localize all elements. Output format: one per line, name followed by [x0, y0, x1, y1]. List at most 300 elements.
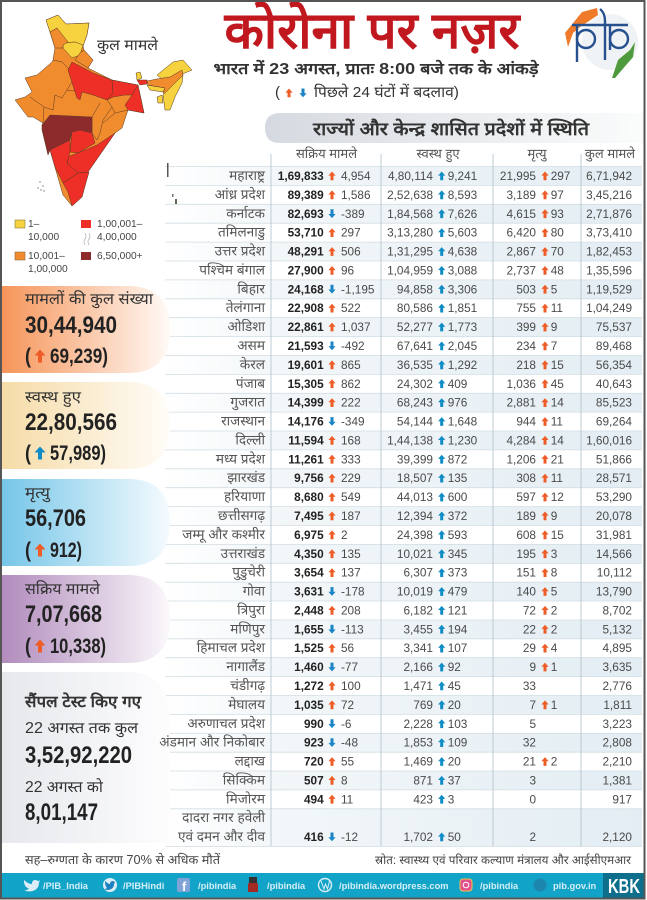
- row: West Bengal: 2,737: [506, 264, 536, 278]
- row: Sikkim: 37: [448, 773, 461, 787]
- row: Haryana: 600: [448, 490, 468, 504]
- row: Chhattisgarh: छत्तीसगढ़: [218, 507, 265, 523]
- row: Andaman and Nicobar: 1,853: [403, 736, 433, 750]
- row: Uttar Pradesh: 4,638: [448, 245, 478, 259]
- row: Himachal Pradesh: हिमाचल प्रदेश: [197, 639, 266, 655]
- row: West Bengal: 96: [341, 264, 355, 278]
- row: Assam: 89,468: [596, 339, 632, 353]
- islands: [37, 163, 177, 204]
- row: Andhra Pradesh: 2,52,638: [387, 188, 433, 202]
- row: Meghalaya: 7: [529, 698, 536, 712]
- row: Madhya Pradesh: 39,399: [397, 452, 433, 466]
- row: Tripura: त्रिपुरा: [237, 601, 265, 618]
- row: Andaman and Nicobar: अंडमान और निकोबार: [159, 734, 265, 750]
- row: Chhattisgarh: 12,394: [397, 509, 433, 523]
- row: Nagaland: 1,460: [294, 660, 324, 674]
- icon: twitter: [24, 880, 40, 892]
- legend: 4,00,000: [97, 232, 137, 243]
- row: Maharashtra: 9,241: [448, 169, 477, 183]
- row shading: [165, 166, 642, 846]
- row: Mizoram: 3: [448, 792, 455, 806]
- row: Puducherry: 6,307: [403, 566, 433, 580]
- row: Himachal Pradesh: 56: [341, 641, 355, 655]
- row: Karnataka: 1,84,568: [387, 207, 433, 221]
- row: Puducherry: 137: [341, 566, 361, 580]
- row: Chhattisgarh: [218, 507, 632, 523]
- row: Meghalaya: मेघालय: [228, 696, 266, 712]
- row: Madhya Pradesh: 21: [551, 452, 564, 466]
- row: Ladakh: 2: [551, 755, 557, 769]
- row: Goa: 140: [516, 585, 536, 599]
- row: Assam: असम: [237, 338, 266, 353]
- row: Odisha: 1,037: [341, 320, 371, 334]
- row: Chandigarh: 1,272: [294, 679, 324, 693]
- row: Assam: 21,593: [288, 339, 324, 353]
- row: Delhi: 1,230: [448, 433, 478, 447]
- row: Madhya Pradesh: 51,866: [596, 452, 632, 466]
- row: Jharkhand: 229: [341, 471, 361, 485]
- footer band: /pibindia: [198, 881, 237, 891]
- card: recovered: 57,989): [50, 442, 106, 465]
- row: Nagaland: -77: [341, 660, 358, 674]
- card: active cases: (: [25, 635, 31, 658]
- row: Kerala: 865: [341, 358, 361, 372]
- icon: facebook: f: [182, 879, 187, 894]
- row: Nagaland: [226, 658, 632, 674]
- row: Jharkhand: 28,571: [596, 471, 632, 485]
- row: Karnataka: [226, 205, 632, 221]
- row: Gujarat: 2,881: [506, 396, 536, 410]
- row: Arunachal Pradesh: 2,228: [403, 717, 433, 731]
- card: total cases: 69,239): [50, 345, 108, 368]
- row: Mizoram: 423: [413, 792, 433, 806]
- row: Kerala: 15: [551, 358, 564, 372]
- column headers: कुल मामले: [585, 146, 635, 162]
- row: Karnataka: 2,71,876: [586, 207, 632, 221]
- row: Gujarat: 976: [448, 396, 468, 410]
- row: Odisha: 1,773: [448, 320, 478, 334]
- row: Uttarakhand: 10,021: [397, 547, 433, 561]
- row: Karnataka: 7,626: [448, 207, 478, 221]
- row: Mizoram: [226, 790, 632, 806]
- row: Maharashtra: 297: [551, 169, 570, 183]
- row: Tamil Nadu: 3,13,280: [387, 226, 433, 240]
- row: Arunachal Pradesh: 5: [529, 717, 536, 731]
- row: Manipur: 5,132: [602, 622, 632, 636]
- row: Puducherry: 10,112: [597, 566, 632, 580]
- row: Dadra Nagar Haveli and Daman Diu: 1,702: [403, 830, 433, 844]
- row: Odisha: 52,277: [397, 320, 433, 334]
- row: Goa: गोवा: [243, 583, 265, 599]
- row: Assam: -492: [341, 339, 365, 353]
- row: Tamil Nadu: 3,73,410: [586, 226, 632, 240]
- row: Maharashtra: 21,995: [500, 169, 536, 183]
- row: Madhya Pradesh: मध्य प्रदेश: [216, 450, 266, 466]
- row: Haryana: 597: [516, 490, 536, 504]
- row: Jharkhand: [227, 470, 632, 485]
- row: Delhi: दिल्ली: [235, 431, 265, 447]
- row: Goa: -178: [341, 585, 365, 599]
- row: Tamil Nadu: [218, 224, 632, 241]
- row: Uttar Pradesh: [215, 243, 632, 259]
- row: Rajasthan: 944: [516, 415, 536, 429]
- icon: wordpress: [318, 878, 332, 892]
- icon: twitter badge: [103, 878, 117, 892]
- card: sample tests: 3,52,92,220: [25, 742, 132, 769]
- card: recovered: स्वस्थ हुए: [25, 389, 81, 407]
- row: Karnataka: 4,615: [506, 207, 536, 221]
- row: Jammu and Kashmir: जम्मू और कश्मीर: [182, 526, 265, 543]
- row: Andaman and Nicobar: [159, 734, 632, 750]
- card: sample tests: 22 अगस्त को: [25, 778, 104, 796]
- row: Mizoram: 0: [529, 792, 536, 806]
- card: recovered: [2, 382, 170, 469]
- row: Kerala: [240, 356, 632, 372]
- row: Bihar: -1,195: [341, 282, 375, 296]
- card: deaths: 912): [50, 539, 82, 562]
- row: Andaman and Nicobar: -48: [341, 736, 358, 750]
- row: Haryana: 44,013: [397, 490, 433, 504]
- row: Kerala: 56,354: [596, 358, 632, 372]
- row: Kerala: 36,535: [397, 358, 433, 372]
- row: West Bengal: 48: [551, 264, 564, 278]
- row: Gujarat: 14: [551, 396, 564, 410]
- row: Tamil Nadu: 6,420: [506, 226, 536, 240]
- row: Meghalaya: 1: [551, 698, 557, 712]
- row: Telangana: 1,04,249: [586, 301, 632, 315]
- row: Odisha: 399: [516, 320, 536, 334]
- row: Delhi: [235, 431, 632, 447]
- row: Bihar: [237, 280, 632, 296]
- row: Puducherry: 373: [448, 566, 468, 580]
- row: Kerala: 19,601: [288, 358, 324, 372]
- row: Jharkhand: 308: [516, 471, 536, 485]
- legend: 1,00,000: [28, 264, 68, 275]
- row: Tripura: 6,182: [403, 603, 433, 617]
- row: Delhi: 1,44,138: [387, 433, 433, 447]
- legend: 1,00,001–: [97, 219, 143, 230]
- row: Karnataka: -389: [341, 207, 365, 221]
- row: Puducherry: पुडुचेरी: [232, 564, 265, 581]
- row: Meghalaya: 769: [413, 698, 433, 712]
- row: Uttar Pradesh: 48,291: [288, 245, 324, 259]
- row: Tripura: [237, 601, 632, 618]
- row: Madhya Pradesh: 333: [341, 452, 361, 466]
- row: Sikkim: 871: [413, 773, 433, 787]
- row: Sikkim: 8: [341, 773, 348, 787]
- card: deaths: (: [25, 539, 31, 562]
- row: Punjab: 1,036: [506, 377, 536, 391]
- row: Puducherry: 3,654: [294, 566, 324, 580]
- row: Punjab: 862: [341, 377, 361, 391]
- row: Punjab: [236, 376, 632, 391]
- change note: (: [275, 84, 280, 101]
- title: कोरोना पर नज़र: [223, 1, 522, 59]
- row: Tripura: 2,448: [294, 603, 324, 617]
- row: Haryana: 53,290: [596, 490, 632, 504]
- row: Himachal Pradesh: 107: [448, 641, 467, 655]
- row: Ladakh: [235, 754, 632, 769]
- card: deaths: 56,706: [25, 505, 86, 532]
- row: West Bengal: [199, 262, 632, 278]
- row: Dadra Nagar Haveli and Daman Diu: 2,120: [602, 830, 632, 844]
- legend: [15, 219, 143, 275]
- row: Assam: [237, 338, 632, 353]
- row: Tripura: 121: [448, 603, 467, 617]
- row: Himachal Pradesh: 29: [523, 641, 536, 655]
- row: Uttarakhand: उत्तराखंड: [221, 546, 266, 561]
- card: recovered: 22,80,566: [25, 409, 117, 436]
- row: Manipur: 194: [448, 622, 468, 636]
- row: Andaman and Nicobar: 32: [523, 736, 536, 750]
- row: Andhra Pradesh: 89,389: [288, 188, 324, 202]
- row: Haryana: हरियाणा: [224, 488, 265, 504]
- row: Jammu and Kashmir: 24,398: [397, 528, 433, 542]
- legend: 10,001–: [28, 251, 65, 262]
- row: Punjab: 15,305: [288, 377, 324, 391]
- row: Arunachal Pradesh: -6: [341, 717, 352, 731]
- row: Delhi: 1,60,016: [586, 433, 632, 447]
- card: total cases: 30,44,940: [25, 312, 117, 339]
- row: Arunachal Pradesh: अरुणाचल प्रदेश: [187, 715, 266, 731]
- row: Uttarakhand: 345: [448, 547, 468, 561]
- row: Chhattisgarh: 20,078: [596, 509, 632, 523]
- row: Madhya Pradesh: [216, 450, 632, 466]
- legend: 6,50,000+: [97, 251, 143, 262]
- row: Maharashtra: महाराष्ट्र: [229, 168, 266, 183]
- table heading pill: राज्यों और केन्द्र शासित प्रदेशों में स्थिति: [312, 118, 590, 139]
- row: Telangana: [226, 299, 632, 315]
- row: Andaman and Nicobar: 923: [304, 736, 324, 750]
- row: Nagaland: 92: [448, 660, 461, 674]
- footer band: /pibindia.wordpress.com: [339, 881, 449, 891]
- row: Assam: 67,641: [397, 339, 433, 353]
- row: Jammu and Kashmir: 31,981: [596, 528, 632, 542]
- row: Punjab: 409: [448, 377, 467, 391]
- row: Ladakh: 1,469: [403, 755, 433, 769]
- row: Punjab: 24,302: [397, 377, 433, 391]
- row: Manipur: -113: [341, 622, 364, 636]
- card: sample tests: [2, 672, 170, 843]
- row: Kerala: 1,292: [448, 358, 477, 372]
- row: Uttar Pradesh: 2,867: [506, 245, 536, 259]
- row: Punjab: 45: [551, 377, 564, 391]
- card: deaths: मृत्यु: [25, 485, 51, 503]
- row: Chhattisgarh: 9: [551, 509, 557, 523]
- row: Ladakh: 55: [341, 755, 355, 769]
- row: Tamil Nadu: 53,710: [288, 226, 324, 240]
- row: Goa: 10,019: [397, 585, 433, 599]
- card: deaths: [2, 479, 170, 566]
- row: Haryana: [224, 488, 632, 504]
- footer band: pib.gov.in: [553, 881, 597, 891]
- row: Chandigarh: चंडीगढ़: [230, 677, 265, 693]
- logo: pib: [565, 8, 638, 78]
- row: Gujarat: 85,523: [596, 396, 632, 410]
- row: Himachal Pradesh: 4: [551, 641, 558, 655]
- column headers: [296, 146, 635, 163]
- row: Manipur: 1,655: [294, 622, 324, 636]
- row: Punjab: 40,643: [596, 377, 632, 391]
- row: Ladakh: 21: [523, 755, 536, 769]
- row: Chhattisgarh: 7,495: [294, 509, 324, 523]
- row: Chandigarh: 33: [523, 679, 536, 693]
- row: Uttar Pradesh: 506: [341, 245, 361, 259]
- table rows: [159, 168, 632, 844]
- row: Telangana: 1,851: [448, 301, 477, 315]
- row: Ladakh: 2,210: [602, 755, 632, 769]
- row: Goa: [243, 583, 632, 599]
- row: Sikkim: 507: [304, 773, 324, 787]
- row: Tamil Nadu: 297: [341, 226, 361, 240]
- row: Dadra Nagar Haveli and Daman Diu: 416: [304, 830, 324, 844]
- row: Andaman and Nicobar: 109: [448, 736, 467, 750]
- row: Telangana: तेलंगाना: [226, 299, 265, 315]
- row: Bihar: बिहार: [237, 280, 265, 296]
- row: Assam: 2,045: [448, 339, 478, 353]
- map label: कुल मामले: [97, 36, 159, 55]
- footer band: /pibindia: [267, 881, 306, 891]
- row: Telangana: 11: [551, 301, 563, 315]
- row: Dadra Nagar Haveli and Daman Diu: 50: [448, 830, 461, 844]
- row: Mizoram: 917: [612, 792, 632, 806]
- row: Puducherry: [232, 564, 632, 581]
- card: total cases: मामलों की कुल संख्या: [25, 290, 154, 309]
- column headers: स्वस्थ हुए: [416, 146, 460, 163]
- row: Andhra Pradesh: 1,586: [341, 188, 371, 202]
- row: Uttar Pradesh: 1,31,295: [387, 245, 433, 259]
- row: Madhya Pradesh: 872: [448, 452, 467, 466]
- row: Uttarakhand: 14,566: [596, 547, 632, 561]
- row: Nagaland: 9: [529, 660, 536, 674]
- row: Gujarat: गुजरात: [230, 395, 265, 411]
- row: Rajasthan: [221, 414, 632, 429]
- row: Telangana: 522: [341, 301, 361, 315]
- card: sample tests: सैंपल टेस्ट किए गए: [24, 692, 142, 711]
- row: Karnataka: कर्नाटक: [226, 205, 266, 221]
- row: Andhra Pradesh: 3,189: [506, 188, 536, 202]
- row: Telangana: 80,586: [397, 301, 433, 315]
- row: Bihar: 503: [516, 282, 536, 296]
- row: West Bengal: पश्चिम बंगाल: [199, 262, 266, 278]
- row: Odisha: [228, 318, 632, 334]
- row: Meghalaya: 1,811: [603, 698, 632, 712]
- row: Mizoram: 494: [304, 792, 324, 806]
- row: Uttar Pradesh: 1,82,453: [586, 245, 632, 259]
- row: Dadra Nagar Haveli and Daman Diu: 2: [529, 830, 536, 844]
- row: Dadra Nagar Haveli and Daman Diu: [178, 809, 632, 844]
- row: Arunachal Pradesh: 990: [304, 717, 324, 731]
- row: Maharashtra: [229, 168, 632, 183]
- card: active cases: 10,338): [50, 635, 106, 658]
- row: Haryana: 549: [341, 490, 361, 504]
- row: Rajasthan: -349: [341, 415, 365, 429]
- row: Manipur: मणिपुर: [230, 620, 265, 637]
- icon: globe: [534, 878, 546, 892]
- row: Delhi: 11,594: [288, 433, 324, 447]
- column headers: मृत्यु: [527, 146, 548, 162]
- row: Maharashtra: 1,69,833: [278, 169, 324, 183]
- row: Tamil Nadu: तमिलनाडु: [218, 224, 266, 241]
- card: total cases: [2, 286, 170, 373]
- footer band: [1, 873, 644, 898]
- row: Gujarat: [230, 395, 632, 411]
- row: Meghalaya: 20: [448, 698, 461, 712]
- row: Dadra Nagar Haveli and Daman Diu: -12: [341, 830, 358, 844]
- row: Jammu and Kashmir: 2: [341, 528, 348, 542]
- row: Manipur: 2: [551, 622, 557, 636]
- row: Jammu and Kashmir: 608: [516, 528, 536, 542]
- row: Andhra Pradesh: 8,593: [448, 188, 478, 202]
- row: Nagaland: नागालैंड: [226, 658, 266, 674]
- row: Jharkhand: 18,507: [397, 471, 433, 485]
- row: Karnataka: 82,693: [288, 207, 324, 221]
- row: Jammu and Kashmir: [182, 526, 632, 543]
- row: Tripura: 208: [341, 603, 361, 617]
- row: Chhattisgarh: 187: [341, 509, 361, 523]
- row: Delhi: 14: [551, 433, 564, 447]
- row: Tripura: 8,702: [602, 603, 632, 617]
- row: Manipur: 3,455: [403, 622, 433, 636]
- change note: पिछले 24 घंटों में बदलाव): [314, 83, 459, 101]
- row: Bihar: 5: [551, 282, 558, 296]
- row: Kerala: 218: [516, 358, 536, 372]
- row: Tamil Nadu: 80: [551, 226, 564, 240]
- row: Mizoram: मिजोरम: [226, 790, 266, 806]
- row: Punjab: पंजाब: [236, 376, 265, 391]
- card: sample tests: 22 अगस्त तक कुल: [25, 720, 139, 738]
- row: Sikkim: [223, 771, 632, 787]
- row: Goa: 13,790: [596, 585, 632, 599]
- row: Gujarat: 68,243: [397, 396, 433, 410]
- row: Kerala: केरल: [240, 356, 266, 372]
- icon: facebook: [177, 878, 190, 894]
- row: Sikkim: 3: [529, 773, 536, 787]
- row: Maharashtra: 4,80,114: [388, 169, 433, 183]
- footer band: /PIB_India: [43, 881, 89, 891]
- row: Sikkim: सिक्किम: [223, 771, 266, 787]
- row: Rajasthan: 1,648: [448, 415, 478, 429]
- row: Tamil Nadu: 5,603: [448, 226, 478, 240]
- row: Haryana: 12: [551, 490, 564, 504]
- legend: 1–: [28, 219, 40, 230]
- row: Jharkhand: झारखंड: [227, 470, 266, 485]
- footer band: /pibindia: [480, 881, 519, 891]
- row: Jharkhand: 135: [448, 471, 468, 485]
- row: West Bengal: 1,35,596: [586, 264, 632, 278]
- row: West Bengal: 27,900: [288, 264, 324, 278]
- row: Puducherry: 151: [516, 566, 536, 580]
- row: Nagaland: 2,166: [403, 660, 433, 674]
- row: Gujarat: 14,399: [288, 396, 324, 410]
- row: Andhra Pradesh: [215, 186, 632, 202]
- row: Nagaland: 1: [551, 660, 557, 674]
- row: Madhya Pradesh: 1,206: [506, 452, 536, 466]
- icon: youtube: [248, 877, 258, 892]
- row: Andaman and Nicobar: 2,808: [602, 736, 632, 750]
- row: Assam: 234: [516, 339, 536, 353]
- row: Uttarakhand: 3: [551, 547, 558, 561]
- row: Meghalaya: 1,035: [294, 698, 324, 712]
- card: active cases: [2, 575, 170, 663]
- row: Jammu and Kashmir: 15: [551, 528, 564, 542]
- row: Manipur: 22: [523, 622, 536, 636]
- row: Odisha: 22,861: [288, 320, 324, 334]
- row: Ladakh: लद्दाख: [235, 754, 266, 769]
- source note: स्रोत: स्वास्थ्य एवं परिवार कल्याण मंत्रालय और आईसीएमआर: [375, 853, 631, 867]
- row: Uttarakhand: 195: [516, 547, 536, 561]
- row: Tripura: 72: [523, 603, 536, 617]
